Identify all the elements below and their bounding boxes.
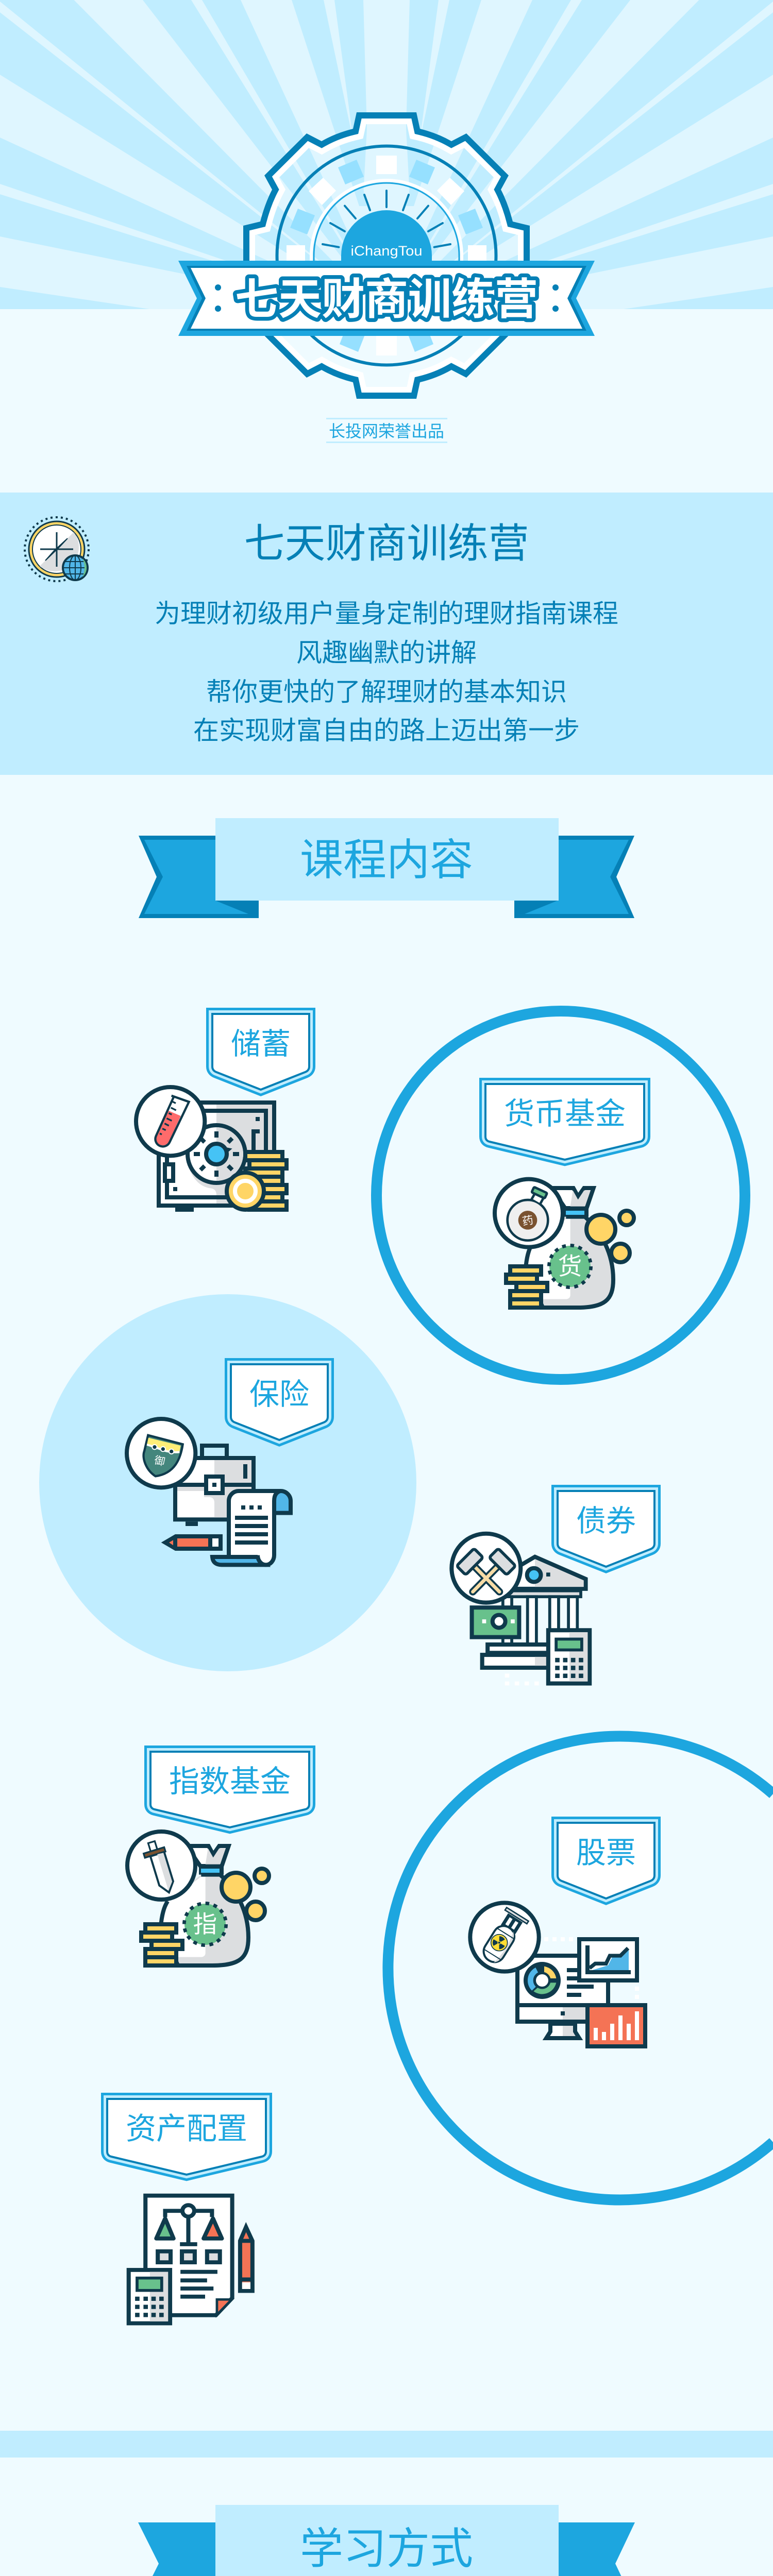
panel: introduction: [0, 493, 773, 775]
sun rays: [323, 191, 450, 247]
label: savings: [212, 1014, 309, 1090]
section heading: course content: 课程内容: [300, 836, 473, 884]
section heading: how to learn: 学习方式: [300, 2524, 473, 2573]
section heading: course content: [139, 818, 634, 918]
label: savings: 储蓄: [231, 1027, 291, 1061]
label: bonds: 债券: [576, 1504, 636, 1538]
label: asset allocation: [107, 2099, 266, 2175]
intro title: 七天财商训练营: [244, 520, 529, 566]
icon: briefcase with policy scroll: 御: [153, 1454, 166, 1468]
ring: stocks: [388, 1736, 773, 2200]
icon: safe with coins: [136, 1087, 289, 1212]
inner arch: [311, 180, 462, 268]
icon: briefcase with policy scroll: [127, 1419, 291, 1565]
intro body text: [155, 599, 618, 745]
label: asset allocation: 资产配置: [126, 2112, 247, 2146]
icon: money bag with sword: [127, 1832, 269, 1968]
divider strip: [0, 2431, 773, 2458]
icon: money bag with potion: 货: [558, 1253, 582, 1280]
intro body text: 为理财初级用户量身定制的理财指南课程: [155, 599, 618, 628]
gear outline: [243, 112, 530, 399]
circle: insurance background: [39, 1294, 416, 1671]
label: insurance: 保险: [249, 1378, 309, 1411]
header sunburst background: [0, 0, 773, 315]
label: money fund: 货币基金: [504, 1097, 626, 1131]
icon: document with scales, calculator and pencil: [129, 2196, 253, 2324]
label: bonds: [558, 1491, 654, 1567]
banner title text: 七天财商训练营: [235, 275, 538, 324]
icon: compass and globe: [25, 517, 89, 581]
label: index fund: [150, 1752, 309, 1827]
label: index fund: 指数基金: [169, 1765, 291, 1799]
icon: bank with hammers: [451, 1534, 590, 1684]
section heading: how to learn: [138, 2505, 635, 2576]
label: stocks: [558, 1823, 654, 1899]
outer ring: [277, 146, 496, 365]
icon: monitor with charts and bomb: [470, 1903, 645, 2046]
label: stocks: 股票: [576, 1836, 636, 1870]
icon: money bag with sword: 指: [193, 1911, 217, 1938]
label: money fund: [485, 1084, 644, 1160]
intro body text: 在实现财富自由的路上迈出第一步: [193, 716, 580, 745]
label: insurance: [231, 1364, 328, 1440]
ring: money fund: [376, 1011, 745, 1380]
icon: money bag with potion: [495, 1179, 634, 1310]
intro body text: 风趣幽默的讲解: [296, 638, 477, 667]
logo badge: gear emblem with banner: [178, 112, 595, 399]
ring tiles: [287, 156, 486, 355]
title banner: [178, 261, 595, 336]
intro body text: 帮你更快的了解理财的基本知识: [206, 677, 567, 706]
sun dome with brand name: iChangTou: [350, 243, 423, 259]
icon: money bag with potion: 药: [522, 1214, 534, 1228]
byline: 长投网荣誉出品: [329, 422, 444, 440]
sun dome with brand name: [341, 210, 432, 268]
